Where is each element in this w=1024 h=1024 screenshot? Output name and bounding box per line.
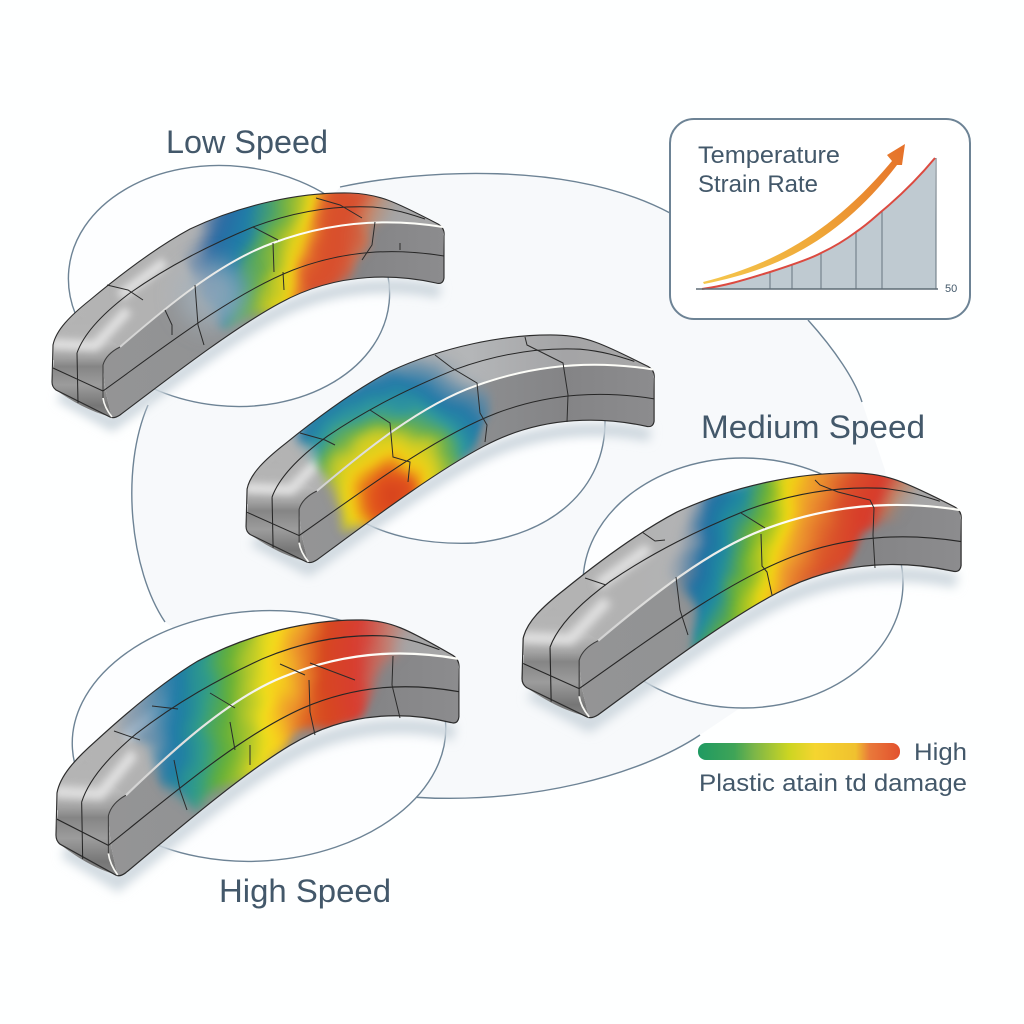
chart label: Strain Rate: Strain Rate	[698, 171, 818, 198]
axis unit mark: 50	[945, 283, 957, 295]
ellipse: medium speed	[583, 458, 903, 708]
legend: plastic strain and damage	[698, 739, 967, 797]
ellipse outline: unlabelled middle speed	[355, 420, 605, 543]
ellipse: low speed	[56, 150, 402, 422]
area under strain curve	[702, 158, 936, 289]
heading: High Speed: High Speed	[219, 873, 391, 909]
axis	[696, 288, 938, 290]
beam: middle unlabelled	[244, 335, 654, 569]
area dividers and axis	[770, 158, 936, 289]
ellipse fill: unlabelled middle speed	[340, 400, 605, 543]
legend caption: Plastic atain td damage	[699, 770, 967, 797]
panel: temperature and strain rate chart	[670, 119, 970, 319]
legend High label: High	[914, 739, 967, 766]
beam: low speed	[50, 185, 444, 424]
heading: Medium Speed: Medium Speed	[701, 409, 925, 445]
beam: medium speed	[520, 450, 961, 725]
rising temperature arrow	[703, 144, 905, 284]
legend colour bar	[698, 743, 900, 760]
beam: high speed	[54, 610, 459, 883]
ellipse: high speed	[64, 598, 454, 874]
red curve	[702, 158, 935, 289]
heading: Low Speed: Low Speed	[166, 124, 328, 160]
chart label: Temperature: Temperature	[698, 142, 840, 169]
background connector blob	[132, 173, 900, 798]
